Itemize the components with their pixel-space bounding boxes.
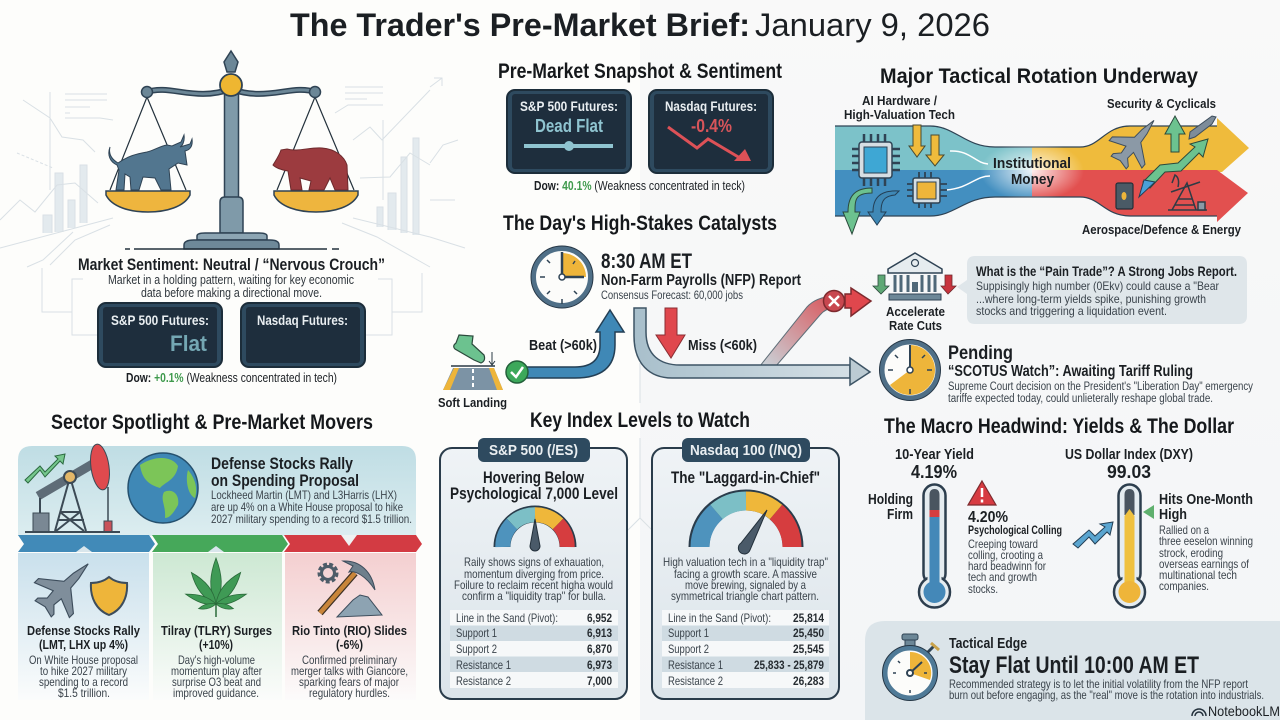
text: hits one-month high: overseas earnings of xyxy=(1159,557,1250,571)
title: January 9, 2026 xyxy=(755,7,990,43)
text: defense column xyxy=(27,623,141,700)
text: tilray column: Day's high-volume xyxy=(178,653,255,667)
callout: pain trade: stocks and triggering a liquidation event. xyxy=(976,304,1167,318)
text: hits one-month high: High xyxy=(1159,507,1187,523)
icon: warning triangle xyxy=(968,481,996,505)
text: tactical edge: Stay Flat Until 10:00 AM ET xyxy=(949,652,1199,679)
text: rio column: sparking fears of major xyxy=(299,675,399,689)
text: hits one-month high: Hits One-Month xyxy=(1159,492,1253,508)
text: AI hardware label: AI Hardware / xyxy=(862,93,937,108)
arrow: blue tip xyxy=(1139,180,1155,197)
heading: sector spotlight: Sector Spotlight & Pre-Market Movers xyxy=(51,411,373,434)
text: defense column: $1.5 trillion. xyxy=(58,686,110,700)
text: Nasdaq headline: The "Laggard-in-Chief" xyxy=(671,469,820,487)
panel: defense stocks hero xyxy=(18,446,416,536)
icon: gear xyxy=(320,565,336,581)
icon: rock xyxy=(337,595,382,617)
title: The Trader's Pre-Market Brief: xyxy=(290,7,750,43)
text: S&P body xyxy=(454,555,613,603)
text: rio column: merger talks with Giancore, xyxy=(291,664,408,678)
table: S&P levels: 6,913 xyxy=(587,626,612,640)
text: psychological ceiling xyxy=(968,509,1062,596)
text: defense column: Defense Stocks Rally xyxy=(27,623,141,638)
icon: right pan xyxy=(274,191,358,212)
table: S&P levels: Support 1 xyxy=(456,626,497,640)
icon: check mark xyxy=(506,361,528,383)
text: hits one-month high: companies. xyxy=(1159,579,1209,593)
text: defense stocks rally: 2027 military spending to a record $1.5 trillion. xyxy=(211,512,412,526)
text: rio column: regulatory hurdles. xyxy=(309,686,390,700)
text: SCOTUS watch: tariffe expected today, could unlieterally reshape global trade. xyxy=(948,393,1213,405)
label: Nasdaq pill: Nasdaq 100 (/NQ) xyxy=(690,442,802,459)
text: 10-year yield xyxy=(895,447,974,482)
text: beat label: Beat (>60k) xyxy=(529,338,597,354)
icon: large chip xyxy=(852,134,900,186)
icon: globe xyxy=(128,453,198,523)
card: S&P 500 xyxy=(440,438,627,699)
text: psychological ceiling: Creeping toward xyxy=(968,537,1038,551)
icon: missile xyxy=(1189,116,1216,139)
table: S&P levels: Resistance 1 xyxy=(456,658,511,672)
text: S&P body: confirm a "liquidity trap" for bulla. xyxy=(462,589,606,603)
icon: pump jack xyxy=(1168,175,1207,210)
text: S&P body: momentum diverging from price. xyxy=(464,567,604,581)
panel: macro headwind xyxy=(868,415,1253,608)
text: NFP report: Consensus Forecast: 60,000 jobs xyxy=(601,288,743,302)
text: NFP report: Non-Farm Payrolls (NFP) Report xyxy=(601,272,801,289)
icon: clock 8:30 xyxy=(531,246,593,308)
text: hits one-month high: multinational tech xyxy=(1159,568,1237,582)
card: Nasdaq -0.4%: Nasdaq Futures: xyxy=(665,98,757,114)
text: institutional money: Money xyxy=(1011,171,1055,188)
text: defense column: to hike 2027 military xyxy=(40,664,127,678)
icon: left pan xyxy=(106,191,190,212)
card: Nasdaq 100 xyxy=(652,438,839,699)
panel: key index levels xyxy=(440,409,839,699)
text: S&P headline xyxy=(450,469,618,503)
icon: bear xyxy=(273,148,348,190)
card: Nasdaq -0.4%: -0.4% xyxy=(691,116,732,136)
heading: rotation: Major Tactical Rotation Underway xyxy=(880,65,1198,88)
arrow: blue zigzag xyxy=(1073,522,1113,548)
text: accelerate rate cuts xyxy=(886,304,945,333)
column: tilray xyxy=(153,553,282,700)
panel: tactical edge xyxy=(865,621,1280,720)
callout: pain trade xyxy=(957,256,1247,324)
table: Nasdaq levels: 25,833 - 25,879 xyxy=(754,658,824,672)
text: SCOTUS watch xyxy=(948,343,1253,405)
text: rio column: Rio Tinto (RIO) Slides xyxy=(292,623,407,638)
chart: rotation flow band xyxy=(835,118,1249,222)
text: 10-year yield: 4.19% xyxy=(911,462,957,482)
icon: yield thermometer xyxy=(919,484,950,608)
text: psychological ceiling: 4.20% xyxy=(968,509,1008,526)
table: S&P levels: Line in the Sand (Pivot): xyxy=(456,611,558,625)
chart: Nasdaq gauge xyxy=(699,500,793,554)
text: tilray column xyxy=(161,623,272,700)
text: accelerate rate cuts: Rate Cuts xyxy=(889,318,942,333)
text: tactical edge: Tactical Edge xyxy=(949,636,1027,652)
text: holding firm: Firm xyxy=(887,507,913,523)
text: US dollar index: US Dollar Index (DXY) xyxy=(1065,447,1193,463)
icon: red X arrow xyxy=(824,288,871,316)
table: S&P levels: 6,973 xyxy=(587,658,612,672)
text: Dow note: Dow: +0.1% (Weakness concentrated in tech) xyxy=(126,371,337,385)
text: S&P headline: Psychological 7,000 Level xyxy=(450,485,618,503)
table: Nasdaq levels: 25,814 xyxy=(793,611,824,625)
panel: high-stakes catalysts xyxy=(438,212,871,410)
text: S&P body: Raily shows signs of exhauation, xyxy=(464,555,604,569)
panel: sector spotlight xyxy=(18,411,422,700)
text: accelerate rate cuts: Accelerate xyxy=(886,304,945,319)
card: S&P dead flat xyxy=(507,90,631,173)
text: tilray column: improved guidance. xyxy=(173,686,259,700)
icon: stopwatch xyxy=(882,634,939,700)
ribbon: category chevrons xyxy=(18,535,422,552)
arrow: gray miss path xyxy=(634,296,870,385)
text: defense stocks rally: on Spending Proposal xyxy=(211,472,359,490)
text: rio column: (-6%) xyxy=(336,637,363,652)
card: S&P dead flat: S&P 500 Futures: xyxy=(520,98,618,114)
icon: jet xyxy=(26,546,106,626)
icon: pickaxe xyxy=(320,561,375,613)
text: NFP report xyxy=(601,250,801,302)
card: Nasdaq -0.4% xyxy=(649,90,773,173)
card: Nasdaq futures blank: Nasdaq Futures: xyxy=(257,312,348,328)
panel: tactical rotation xyxy=(835,65,1249,237)
icon: green pointer xyxy=(1143,505,1154,519)
table: Nasdaq levels: Resistance 1 xyxy=(668,658,723,672)
text: Nasdaq body: facing a growth scare. A massive xyxy=(674,567,817,581)
text: psychological ceiling: tech and growth xyxy=(968,570,1037,584)
table: S&P levels: 6,952 xyxy=(587,611,612,625)
text: hits one-month high xyxy=(1159,492,1253,593)
icon: shield xyxy=(91,577,127,615)
text: tilray column: momentum play after xyxy=(171,664,262,678)
text: psychological ceiling: colling, crooting a xyxy=(968,548,1043,562)
panel: pre-market snapshot xyxy=(498,60,782,193)
table: S&P levels xyxy=(450,610,618,688)
heading: key index levels: Key Index Levels to Watch xyxy=(530,409,750,432)
icon: dollar thermometer xyxy=(1114,484,1145,608)
table: Nasdaq levels: 25,450 xyxy=(793,626,824,640)
text: aerospace label: Aerospace/Defence & Energy xyxy=(1082,222,1242,237)
icon: fighter jet xyxy=(1102,107,1170,176)
icon: leaf xyxy=(185,558,247,617)
label: Nasdaq pill xyxy=(682,438,810,462)
text: tactical edge xyxy=(949,636,1264,702)
text: Dow note: Dow: 40.1% (Weakness concentrated in teck) xyxy=(534,179,745,193)
icon: oil pump with arrow xyxy=(25,443,120,532)
text: defense column: spending to a record xyxy=(39,675,128,689)
text: sentiment description: data before making a directional move. xyxy=(141,286,322,300)
text: defense column: On White House proposal xyxy=(29,653,138,667)
table: Nasdaq levels: 26,283 xyxy=(793,674,824,688)
text: hits one-month high: three eeselon winning xyxy=(1159,534,1253,548)
text: holding firm: Holding xyxy=(868,492,913,508)
card: S&P 500 futures flat xyxy=(98,303,222,367)
arrows: green and blue outflow xyxy=(843,188,899,234)
text: rio column: Confirmed preliminary xyxy=(302,653,397,667)
text: security label: Security & Cyclicals xyxy=(1107,96,1216,111)
icon: oil barrel xyxy=(1116,183,1133,209)
column: rio tinto xyxy=(285,553,416,700)
arrow: red miss xyxy=(656,308,685,358)
text: miss label: Miss (<60k) xyxy=(688,338,757,354)
icon: bank building xyxy=(873,253,956,300)
table: Nasdaq levels: Support 1 xyxy=(668,626,709,640)
text: institutional money xyxy=(993,155,1071,188)
text: Nasdaq body: High valuation tech in a "liquidity trap" xyxy=(663,555,828,569)
text: psychological ceiling: Psychological Colling xyxy=(968,523,1062,537)
text: holding firm xyxy=(868,492,913,523)
text: hits one-month high: strock, eroding xyxy=(1159,546,1223,560)
heading: market sentiment: Market Sentiment: Neutral / “Nervous Crouch” xyxy=(78,256,385,274)
column: defense stocks xyxy=(18,546,149,700)
text: US dollar index xyxy=(1065,447,1193,482)
card: S&P 500 futures flat: S&P 500 Futures: xyxy=(111,312,209,328)
arrow: green zigzag xyxy=(1143,139,1208,188)
text: AI hardware label xyxy=(844,93,955,122)
title xyxy=(290,7,990,43)
text: psychological ceiling: stocks. xyxy=(968,582,998,596)
table: Nasdaq levels: Line in the Sand (Pivot): xyxy=(668,611,771,625)
card: S&P 500 futures flat: Flat xyxy=(170,331,208,356)
icon: balance scale with bull and bear xyxy=(106,51,358,249)
icon: small chip xyxy=(907,172,947,208)
text: 10-year yield: 10-Year Yield xyxy=(895,447,974,463)
text: S&P headline: Hovering Below xyxy=(483,469,584,487)
arrow: green up xyxy=(1165,116,1185,152)
chart: S&P gauge xyxy=(502,514,568,551)
text: institutional money: Institutional xyxy=(993,155,1071,172)
table: Nasdaq levels: 25,545 xyxy=(793,642,824,656)
table: S&P levels: 7,000 xyxy=(587,674,612,688)
text: soft landing: Soft Landing xyxy=(438,395,507,410)
text: defense stocks rally: Defense Stocks Rally xyxy=(211,455,354,473)
text: US dollar index: 99.03 xyxy=(1107,462,1151,482)
text: tilray column: Tilray (TLRY) Surges xyxy=(161,623,272,638)
card: S&P dead flat: Dead Flat xyxy=(535,116,603,136)
text: defense stocks rally: Lockheed Martin (LMT) and L3Harris (LHX) xyxy=(211,488,397,502)
heading: snapshot: Pre-Market Snapshot & Sentiment xyxy=(498,60,782,83)
table: Nasdaq levels: Support 2 xyxy=(668,642,709,656)
icon: pending clock xyxy=(880,340,940,400)
table: S&P levels: Support 2 xyxy=(456,642,497,656)
label: S&P pill xyxy=(478,438,590,462)
label: S&P pill: S&P 500 (/ES) xyxy=(489,442,578,459)
arrows: yellow inflow xyxy=(909,125,944,166)
background chart lines xyxy=(0,78,652,530)
text: Nasdaq body xyxy=(663,555,828,603)
text: defense stocks rally xyxy=(211,455,412,526)
text: AI hardware label: High-Valuation Tech xyxy=(844,107,955,122)
table: Nasdaq levels xyxy=(662,610,829,688)
text: SCOTUS watch: “SCOTUS Watch”: Awaiting Tariff Ruling xyxy=(948,363,1193,380)
callout: pain trade: Suppisingly high number (0Ekv) could cause a "Bear xyxy=(976,279,1219,293)
table: Nasdaq levels: Resistance 2 xyxy=(668,674,723,688)
callout: pain trade: ...where long-term yields spike, punishing growth xyxy=(976,292,1206,306)
text: tilray column: surprise O3 beat and xyxy=(172,675,261,689)
text: NFP report: 8:30 AM ET xyxy=(601,250,692,273)
text: sentiment description: Market in a holding pattern, waiting for key economic xyxy=(108,273,354,287)
text: sentiment description xyxy=(108,273,354,300)
text: defense column: (LMT, LHX up 4%) xyxy=(39,637,128,652)
text: defense stocks rally: are up 4% on a White House proposal to hike xyxy=(211,500,403,514)
heading: catalysts: The Day's High-Stakes Catalysts xyxy=(503,212,777,235)
text: SCOTUS watch: Pending xyxy=(948,343,1013,364)
text: psychological ceiling: hard beadwinn for xyxy=(968,559,1046,573)
panel: market sentiment xyxy=(78,256,385,385)
text: hits one-month high: Rallied on a xyxy=(1159,523,1209,537)
text: Nasdaq body: symmetrical triangle chart pattern. xyxy=(671,589,819,603)
table: S&P levels: 6,870 xyxy=(587,642,612,656)
text: Nasdaq body: move brewing, signaled by a xyxy=(685,578,806,592)
text: tilray column: (+10%) xyxy=(199,637,233,652)
text: rio column xyxy=(291,623,408,700)
table: S&P levels: Resistance 2 xyxy=(456,674,511,688)
arrow: blue beat xyxy=(525,310,624,378)
text: S&P body: Foilure to reclaim recent higha would xyxy=(454,578,613,592)
icon: soft landing road and shoe xyxy=(443,335,503,390)
card: Nasdaq futures blank xyxy=(241,303,365,367)
icon: bull xyxy=(109,135,192,190)
